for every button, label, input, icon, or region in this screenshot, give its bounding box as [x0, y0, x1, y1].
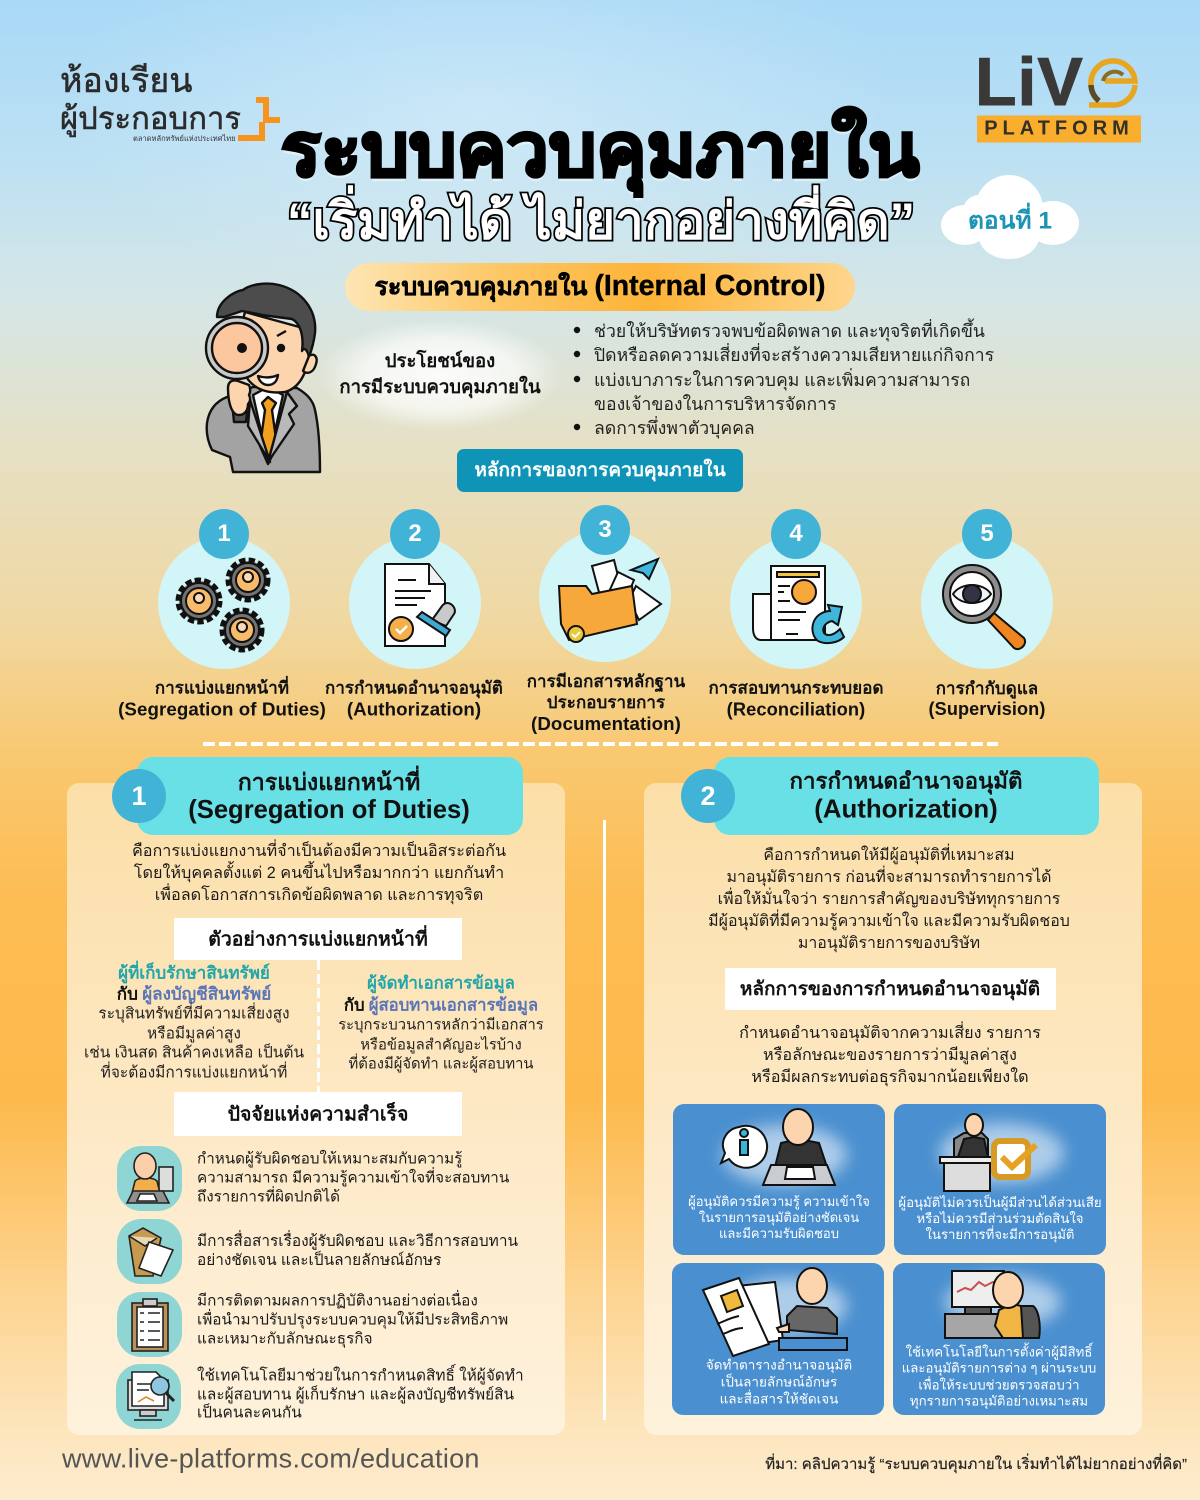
cloud badge: episode 1	[941, 175, 1079, 259]
card: written authority table: จัดทำตารางอำนาจอนุมัติ	[706, 1358, 852, 1372]
list: benefits: แบ่งเบาภาระในการควบคุม และเพิ่มความสามารถ	[594, 370, 970, 390]
example: preparer vs reviewer	[338, 973, 544, 1072]
logo: classroom for entrepreneurs: ตลาดหลักทรัพย์แห่งประเทศไทย	[133, 134, 236, 143]
example: asset custodian vs asset recorder	[84, 960, 304, 1081]
principle 2: (Authorization)	[347, 698, 481, 720]
card: approver knowledge: ในรายการอนุมัติอย่างชัดเจน	[699, 1210, 859, 1225]
factor 3: เพื่อนำมาปรับปรุงระบบควบคุมให้มีประสิทธิภาพ	[197, 1312, 508, 1328]
principle text: กำหนดอำนาจอนุมัติจากความเสี่ยง รายการ	[739, 1024, 1041, 1042]
text block: benefits heading on cloud: ประโยชน์ของ	[385, 350, 495, 371]
website url: www.live-platforms.com/education	[62, 1444, 480, 1474]
principle 1: 1	[217, 520, 231, 547]
factor 4	[116, 1364, 524, 1429]
box heading: principles of authorization: หลักการของการกำหนดอำนาจอนุมัติ	[740, 979, 1040, 1000]
panel header: 2	[700, 780, 716, 810]
factor 2: มีการสื่อสารเรื่องผู้รับผิดชอบ และวิธีการสอบทาน	[197, 1233, 518, 1250]
definition text: โดยให้บุคคลตั้งแต่ 2 คนขึ้นไปหรือมากกว่า แยกกันทำ	[134, 864, 504, 882]
principle 3: 3	[598, 516, 612, 543]
panel: segregation of duties	[67, 757, 565, 1435]
principle 2: 2	[408, 520, 422, 547]
subtitle: “เริ่มทำได้ ไม่ยากอย่างที่คิด”	[287, 192, 915, 250]
example: asset custodian vs asset recorder: ที่จะต้องมีการแบ่งแยกหน้าที่	[101, 1064, 287, 1081]
logo: LiVe Platform: LiV	[975, 44, 1084, 120]
card: technology: เพื่อให้ระบบช่วยตรวจสอบว่า	[918, 1377, 1080, 1392]
principle 4: (Reconciliation)	[727, 698, 865, 720]
logo: classroom for entrepreneurs: ผู้ประกอบการ	[60, 101, 241, 136]
principle 5	[921, 509, 1053, 719]
factor 2: อย่างชัดเจน และเป็นลายลักษณ์อักษร	[197, 1252, 441, 1269]
factor 4: และผู้สอบทาน ผู้เก็บรักษา และผู้ลงบัญชีทรัพย์สิน	[197, 1386, 514, 1403]
example: preparer vs reviewer: ผู้จัดทำเอกสารข้อมูล	[367, 973, 515, 992]
card: technology: ทุกรายการอนุมัติอย่างเหมาะสม	[910, 1393, 1088, 1408]
logo: LiVe Platform: PLATFORM	[984, 118, 1134, 140]
principle 1: การแบ่งแยกหน้าที่	[155, 678, 289, 698]
example: asset custodian vs asset recorder: เช่น เงินสด สินค้าคงเหลือ เป็นต้น	[84, 1044, 304, 1062]
principle text	[739, 1021, 1041, 1086]
principle 4	[708, 509, 884, 720]
box heading: examples: ตัวอย่างการแบ่งแยกหน้าที่	[208, 928, 428, 950]
principle 5: การกำกับดูแล	[936, 679, 1038, 698]
definition text	[132, 839, 506, 904]
panel: authorization	[644, 757, 1142, 1435]
factor 1: ความสามารถ มีความรู้ความเข้าใจที่จะสอบทาน	[197, 1170, 509, 1186]
list: benefits: ของเจ้าของในการบริหารจัดการ	[594, 394, 836, 414]
principle 1: (Segregation of Duties)	[118, 698, 326, 720]
card: written authority table: เป็นลายลักษณ์อักษร	[721, 1374, 837, 1390]
text block: benefits heading on cloud: การมีระบบควบคุมภายใน	[339, 376, 541, 397]
card: technology: ใช้เทคโนโลยีในการตั้งค่าผู้มีสิทธิ์	[906, 1344, 1092, 1359]
example: asset custodian vs asset recorder: ระบุสินทรัพย์ที่มีความเสี่ยงสูง	[98, 1006, 290, 1022]
panel header: 1	[131, 780, 147, 810]
factor 4: เป็นคนละคนกัน	[197, 1404, 302, 1421]
text block: benefits heading on cloud	[332, 326, 548, 426]
principle text: หรือมีผลกระทบต่อธุรกิจมากน้อยเพียงใด	[751, 1068, 1029, 1086]
example: asset custodian vs asset recorder: หรือมีมูลค่าสูง	[147, 1025, 241, 1042]
button heading: principles of internal control: หลักการของการควบคุมภายใน	[474, 460, 726, 481]
card: approver independence: หรือไม่ควรมีส่วนร่วมตัดสินใจ	[916, 1211, 1084, 1226]
cloud badge: episode 1: ตอนที่ 1	[968, 208, 1052, 234]
principle 1	[118, 509, 326, 720]
definition text: มาอนุมัติรายการ ก่อนที่จะสามารถทำรายการได้	[727, 869, 1051, 886]
box heading: examples	[174, 918, 462, 960]
source credit: ที่มา: คลิปความรู้ “ระบบควบคุมภายใน เริ่มทำได้ไม่ยากอย่างที่คิด”	[765, 1456, 1187, 1473]
definition text: มาอนุมัติรายการของบริษัท	[798, 935, 980, 952]
list: benefits: ปิดหรือลดความเสี่ยงที่จะสร้างความเสียหายแก่กิจการ	[594, 345, 994, 365]
card: approver knowledge	[673, 1104, 885, 1255]
example: asset custodian vs asset recorder: กับ ผู้ลงบัญชีสินทรัพย์	[117, 984, 271, 1003]
title: ระบบควบคุมภายใน	[281, 108, 919, 192]
box heading: success factors	[174, 1092, 462, 1136]
logo: classroom for entrepreneurs: ห้องเรียน	[60, 62, 192, 100]
panel header	[681, 757, 1099, 835]
card: approver independence	[894, 1104, 1106, 1255]
list: benefits: ช่วยให้บริษัทตรวจพบข้อผิดพลาด และทุจริตที่เกิดขึ้น	[594, 321, 985, 341]
card: technology	[893, 1263, 1105, 1415]
icon: man with magnifying glass	[204, 282, 322, 474]
logo: classroom for entrepreneurs	[60, 62, 280, 143]
panel header: การกำหนดอำนาจอนุมัติ	[790, 768, 1022, 794]
principle 4: 4	[789, 520, 803, 547]
principle 3	[527, 505, 686, 734]
factor 1: กำหนดผู้รับผิดชอบให้เหมาะสมกับความรู้	[197, 1150, 462, 1168]
example: preparer vs reviewer: ระบุกระบวนการหลักว่ามีเอกสาร	[338, 1017, 544, 1033]
factor 3	[117, 1290, 508, 1357]
list: benefits: ลดการพึ่งพาตัวบุคคล	[594, 418, 755, 438]
example: preparer vs reviewer: กับ ผู้สอบทานเอกสารข้อมูล	[344, 995, 538, 1014]
factor 3: มีการติดตามผลการปฏิบัติงานอย่างต่อเนื่อง	[197, 1292, 478, 1310]
card: approver knowledge: ผู้อนุมัติควรมีความรู้ ความเข้าใจ	[688, 1194, 870, 1209]
card: approver independence: ในรายการที่จะมีการอนุมัติ	[925, 1227, 1075, 1242]
list: benefits	[574, 318, 994, 438]
button heading: principles of internal control	[457, 449, 743, 492]
principle 2	[325, 509, 503, 720]
principle 2: การกำหนดอำนาจอนุมัติ	[325, 678, 503, 698]
principle 4: การสอบทานกระทบยอด	[708, 678, 884, 698]
panel header: (Segregation of Duties)	[188, 796, 470, 824]
definition text: มีผู้อนุมัติที่มีความรู้ความเข้าใจ และมีความรับผิดชอบ	[708, 913, 1070, 930]
factor 4: ใช้เทคโนโลยีมาช่วยในการกำหนดสิทธิ์ ให้ผู้จัดทำ	[197, 1367, 524, 1384]
panel header	[112, 757, 523, 835]
principle text: หรือลักษณะของรายการว่ามีมูลค่าสูง	[763, 1046, 1017, 1064]
definition text: คือการแบ่งแยกงานที่จำเป็นต้องมีความเป็นอิสระต่อกัน	[132, 842, 506, 860]
example: asset custodian vs asset recorder: ผู้ที่เก็บรักษาสินทรัพย์	[118, 964, 270, 982]
section heading pill: internal control	[345, 263, 855, 311]
card: technology: และอนุมัติรายการต่าง ๆ ผ่านระบบ	[902, 1361, 1096, 1376]
principle 3: (Documentation)	[531, 713, 681, 734]
panel header: การแบ่งแยกหน้าที่	[238, 769, 420, 795]
factor 1	[117, 1146, 509, 1211]
factor 1: ถึงรายการที่ผิดปกติได้	[197, 1188, 340, 1206]
card: approver independence: ผู้อนุมัติไม่ควรเป็นผู้มีส่วนได้ส่วนเสีย	[898, 1195, 1102, 1210]
card: written authority table: และสื่อสารให้ชัดเจน	[720, 1392, 838, 1406]
principle 5: 5	[980, 520, 994, 547]
example: preparer vs reviewer: ที่ต้องมีผู้จัดทำ และผู้สอบทาน	[348, 1056, 534, 1072]
principle 3: ประกอบรายการ	[547, 693, 665, 712]
panel header: (Authorization)	[814, 796, 998, 824]
card: approver knowledge: และมีความรับผิดชอบ	[719, 1226, 839, 1241]
section heading pill: internal control: ระบบควบคุมภายใน (Internal Control)	[374, 270, 826, 302]
definition text	[708, 844, 1070, 952]
box heading: success factors: ปัจจัยแห่งความสำเร็จ	[228, 1104, 408, 1126]
card: written authority table	[672, 1263, 884, 1415]
box heading: principles of authorization	[725, 968, 1056, 1010]
definition text: เพื่อให้มั่นใจว่า รายการสำคัญของบริษัททุกรายการ	[718, 891, 1060, 908]
definition text: คือการกำหนดให้มีผู้อนุมัติที่เหมาะสม	[763, 847, 1015, 864]
factor 3: และเหมาะกับลักษณะธุรกิจ	[197, 1330, 373, 1348]
factor 2	[117, 1219, 518, 1284]
example: preparer vs reviewer: หรือข้อมูลสำคัญอะไรบ้าง	[360, 1037, 522, 1053]
definition text: เพื่อลดโอกาสการเกิดข้อผิดพลาด และการทุจริต	[155, 886, 483, 904]
logo: LiVe Platform	[975, 44, 1141, 142]
principle 3: การมีเอกสารหลักฐาน	[527, 672, 685, 691]
principle 5: (Supervision)	[929, 699, 1045, 719]
